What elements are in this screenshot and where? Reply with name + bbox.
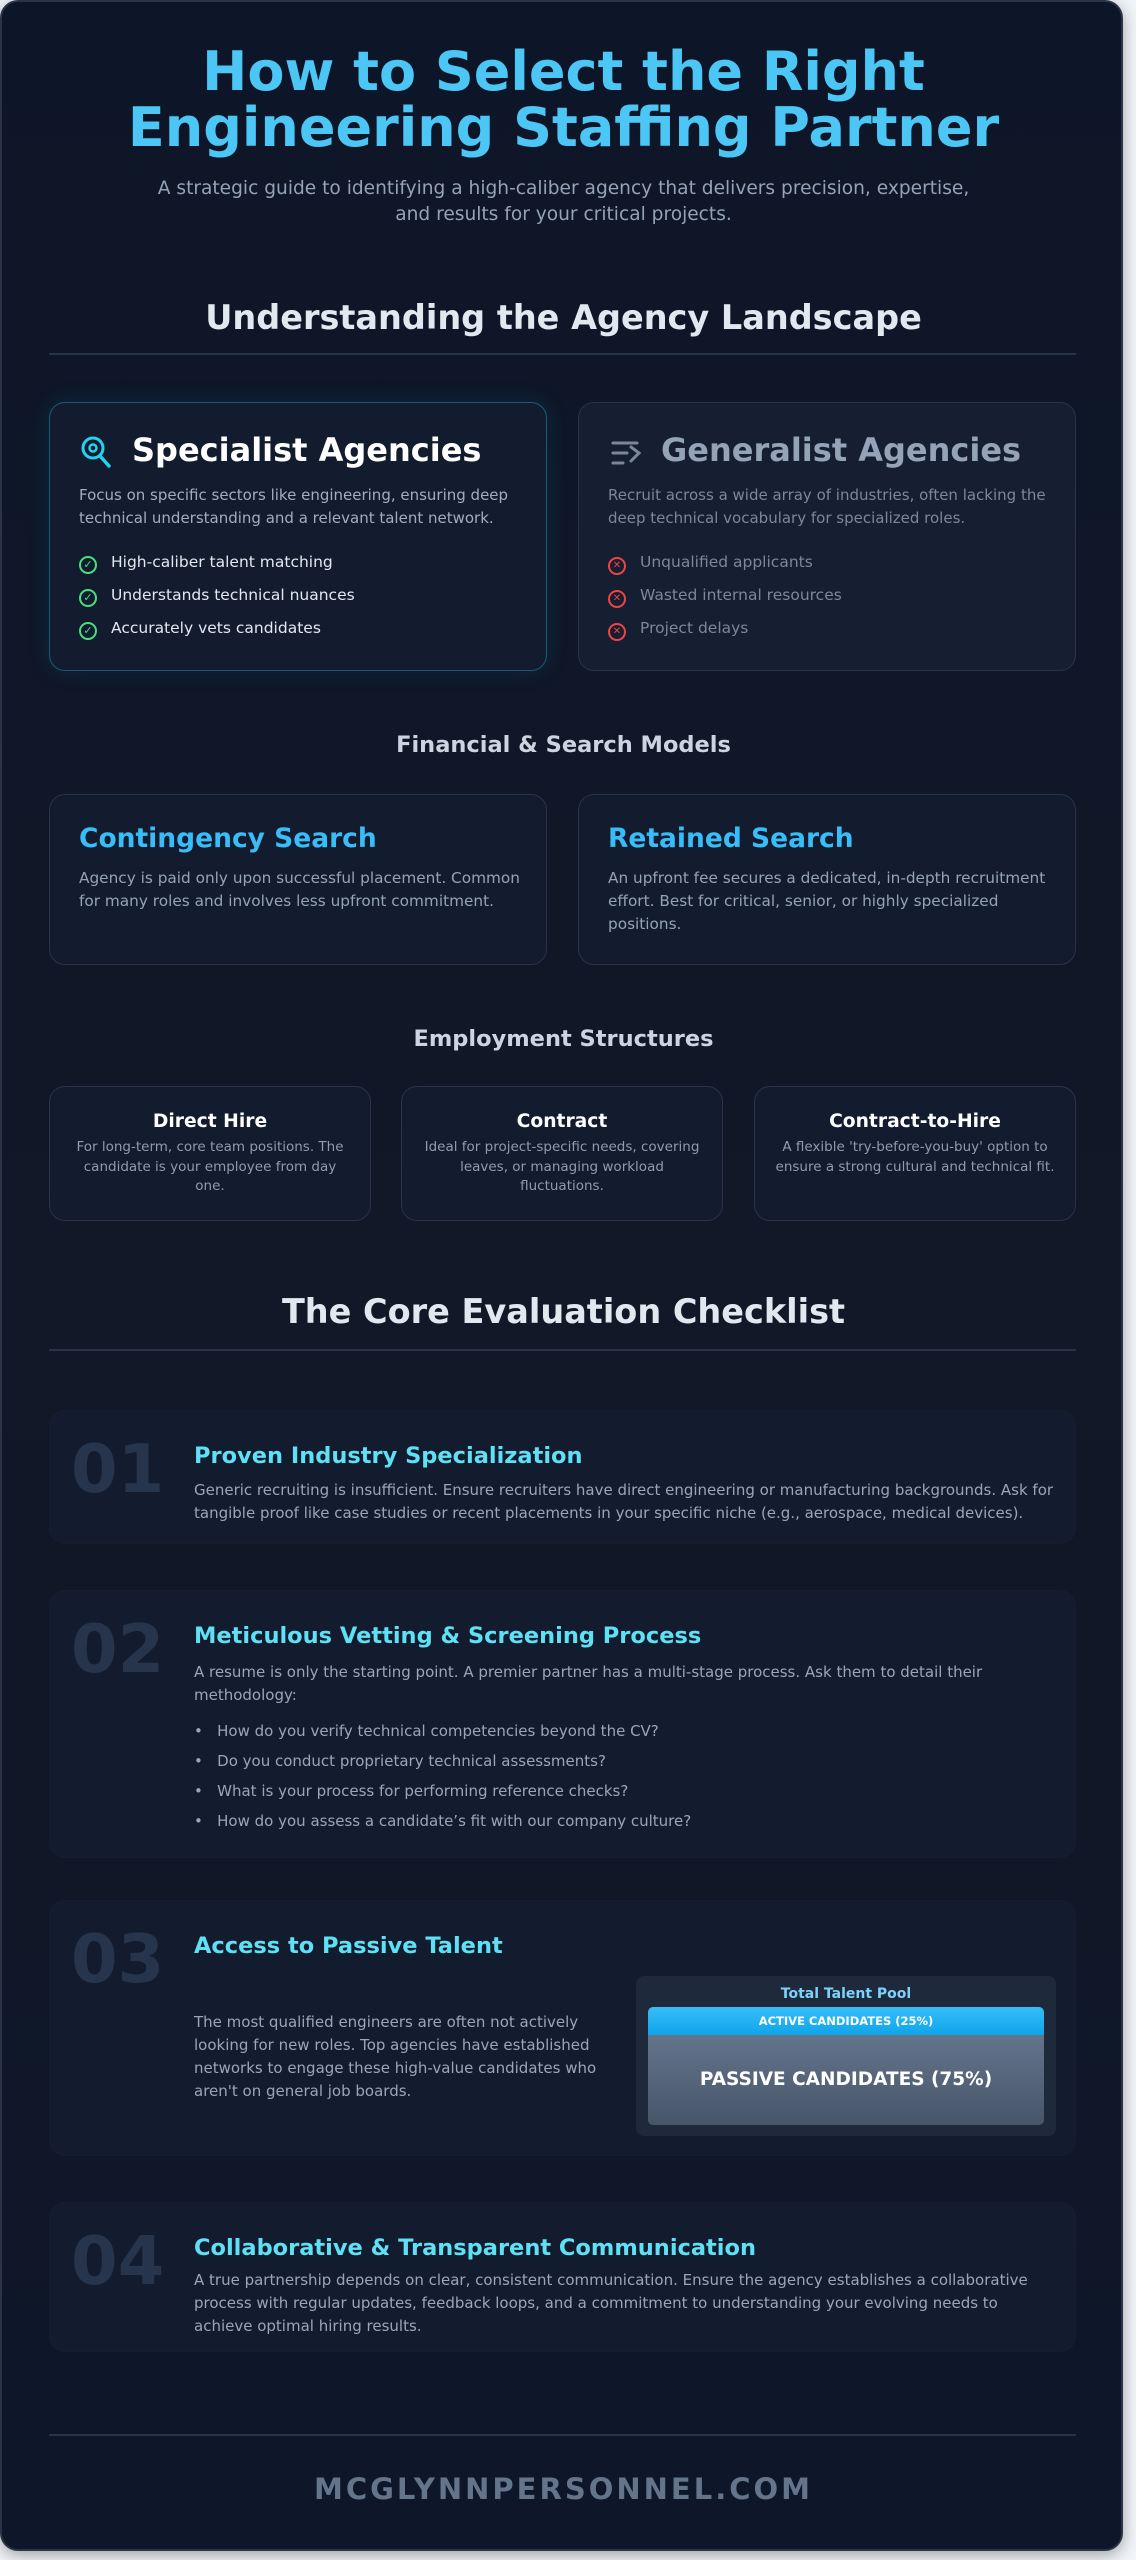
checklist: ✓	[83, 591, 93, 604]
checklist: ✓	[83, 624, 93, 637]
heading: core checklist: The Core Evaluation Checklist	[282, 1292, 845, 1331]
chart: talent pool: ACTIVE CANDIDATES (25%)	[759, 2014, 933, 2028]
card title: Generalist Agencies	[661, 431, 1021, 469]
panel: specialist agencies	[49, 402, 547, 671]
negatives list: Wasted internal resources	[640, 586, 842, 604]
item 02: A resume is only the starting point. A premier partner has a multi-stage process. Ask them to detail their methodology:	[194, 1663, 982, 1704]
bullet questions	[194, 1722, 691, 1830]
heading: agency landscape: Understanding the Agency Landscape	[205, 298, 922, 337]
panel: retained search	[578, 794, 1076, 965]
panel: direct hire	[49, 1086, 371, 1221]
negatives list: ✕	[613, 560, 621, 571]
panel: contract-to-hire: A flexible 'try-before-you-buy' option to ensure a strong cultural and technical fit.	[776, 1139, 1054, 1174]
negatives list	[608, 553, 842, 641]
description: Recruit across a wide array of industries, often lacking the deep technical vocabulary for specialized roles.	[608, 486, 1046, 527]
title: Engineering Staffing Partner	[128, 96, 999, 159]
item 01: Generic recruiting is insufficient. Ensure recruiters have direct engineering or manufacturing backgrounds. Ask for tangible proof like case studies or recent placements in your specific niche (e.g., aerospace, medical devices).	[194, 1481, 1053, 1522]
item 03: 03	[71, 1920, 164, 1998]
subtitle	[158, 178, 969, 225]
footer: MCGLYNNPERSONNEL.COM	[314, 2472, 813, 2506]
panel: contingency search: Agency is paid only upon successful placement. Common for many roles and involves less upfront commitment.	[79, 869, 520, 910]
subtitle: and results for your critical projects.	[395, 204, 732, 225]
title: How to Select the Right	[202, 40, 925, 103]
item 03: Access to Passive Talent	[194, 1933, 503, 1959]
item 02	[49, 1590, 1076, 1858]
panel: retained search: An upfront fee secures a dedicated, in-depth recruitment effort. Best for critical, senior, or highly specialized positions.	[608, 869, 1045, 933]
panel: retained search: Retained Search	[608, 823, 854, 854]
checklist: High-caliber talent matching	[111, 553, 333, 571]
panel: contingency search	[49, 794, 547, 965]
bullet questions: • Do you conduct proprietary technical assessments?	[194, 1752, 606, 1770]
panel: direct hire: Direct Hire	[153, 1111, 267, 1132]
bullet questions: • How do you verify technical competencies beyond the CV?	[194, 1722, 659, 1740]
negatives list: Project delays	[640, 619, 748, 637]
checklist: Accurately vets candidates	[111, 619, 321, 637]
negatives list: ✕	[613, 626, 621, 637]
panel: contract: Ideal for project-specific needs, covering leaves, or managing workload fluctuations.	[425, 1139, 699, 1194]
panel: generalist agencies	[578, 402, 1076, 671]
title	[128, 40, 999, 159]
subtitle: A strategic guide to identifying a high-caliber agency that delivers precision, expertise,	[158, 178, 969, 199]
panel: contract-to-hire: Contract-to-Hire	[829, 1111, 1001, 1132]
item 02: 02	[71, 1610, 164, 1688]
panel: contract	[401, 1086, 723, 1221]
item 01	[49, 1410, 1076, 1544]
chart: talent pool: Total Talent Pool	[781, 1986, 911, 2002]
heading: employment structures: Employment Structures	[413, 1026, 714, 1052]
checklist	[79, 553, 355, 640]
bullet questions: • What is your process for performing reference checks?	[194, 1782, 628, 1800]
negatives list: ✕	[613, 593, 621, 604]
bullet questions: • How do you assess a candidate’s fit with our company culture?	[194, 1812, 691, 1830]
item 03: The most qualified engineers are often not actively looking for new roles. Top agencies have established networks to engage these high-value candidates who aren't on general job boards.	[194, 2013, 596, 2100]
item 04: 04	[71, 2222, 164, 2300]
item 01: 01	[71, 1430, 164, 1508]
item 02: Meticulous Vetting & Screening Process	[194, 1623, 701, 1649]
heading: financial models: Financial & Search Models	[396, 732, 731, 758]
chart: talent pool: PASSIVE CANDIDATES (75%)	[700, 2069, 992, 2090]
panel: contract-to-hire	[754, 1086, 1076, 1221]
panel: direct hire: For long-term, core team positions. The candidate is your employee from day one.	[76, 1139, 344, 1194]
icon: magnifier	[82, 436, 111, 468]
negatives list: Unqualified applicants	[640, 553, 813, 571]
checklist: ✓	[83, 558, 93, 571]
chart: talent pool	[636, 1976, 1056, 2136]
checklist: Understands technical nuances	[111, 586, 355, 604]
item 04	[49, 2202, 1076, 2352]
panel: contingency search: Contingency Search	[79, 823, 377, 854]
item 04: Collaborative & Transparent Communication	[194, 2235, 756, 2261]
description: Focus on specific sectors like engineering, ensuring deep technical understanding and a relevant talent network.	[79, 486, 508, 527]
card title: Specialist Agencies	[132, 431, 481, 469]
panel: contract: Contract	[517, 1111, 607, 1132]
item 04: A true partnership depends on clear, consistent communication. Ensure the agency establishes a collaborative process with regular updates, feedback loops, and a commitment to understanding your evolving needs to achieve optimal hiring results.	[194, 2271, 1028, 2335]
item 01: Proven Industry Specialization	[194, 1443, 583, 1469]
icon: shuffle lines	[612, 442, 642, 464]
item 03	[49, 1900, 1076, 2156]
